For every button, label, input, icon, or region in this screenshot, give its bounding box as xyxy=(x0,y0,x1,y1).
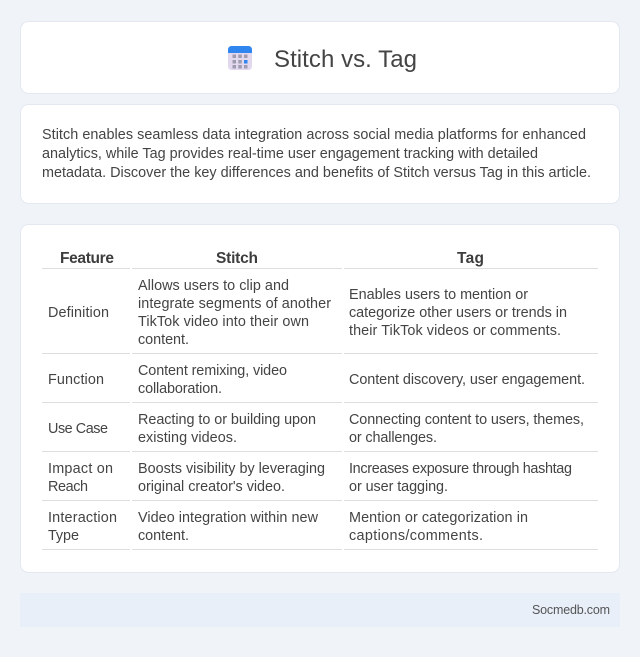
row: interaction type: Mention or categorization in xyxy=(349,510,528,526)
row: function: Content discovery, user engagement. xyxy=(349,372,585,388)
row: definition: TikTok video into their own xyxy=(138,314,309,330)
row: interaction type: captions/comments. xyxy=(349,528,483,544)
row: definition: Definition xyxy=(48,305,109,321)
title: Stitch vs. Tag xyxy=(274,46,417,73)
row: impact on reach: Increases exposure through hashtag xyxy=(349,461,572,477)
row: interaction type: content. xyxy=(138,528,189,544)
row: definition: content. xyxy=(138,332,189,348)
row: definition: Enables users to mention or xyxy=(349,287,528,303)
row: impact on reach: or user tagging. xyxy=(349,479,448,495)
row: definition: their TikTok videos or comments. xyxy=(349,323,561,339)
row: definition: Allows users to clip and xyxy=(138,278,289,294)
row: impact on reach: Impact on xyxy=(48,461,113,477)
panel: title card xyxy=(20,22,620,94)
row: use case: existing videos. xyxy=(138,430,237,446)
row: function: Function xyxy=(48,372,104,388)
row: interaction type: Video integration within new xyxy=(138,510,319,526)
row: interaction type: Interaction xyxy=(48,510,117,526)
table header xyxy=(60,250,484,267)
intro paragraph: Stitch enables seamless data integration across social media platforms for enhanced xyxy=(42,127,586,143)
panel: comparison table xyxy=(20,224,620,572)
table header: Feature xyxy=(60,250,114,267)
row: function xyxy=(48,363,585,397)
row: function: collaboration. xyxy=(138,381,222,397)
row: use case: Reacting to or building upon xyxy=(138,412,316,428)
row: impact on reach xyxy=(48,461,572,495)
row: impact on reach: original creator's video. xyxy=(138,479,285,495)
footer source: Socmedb.com xyxy=(532,603,610,617)
panel: intro text xyxy=(20,104,620,204)
row: definition: integrate segments of another xyxy=(138,296,331,312)
row: definition: categorize other users or trends in xyxy=(349,305,567,321)
row: impact on reach: Boosts visibility by leveraging xyxy=(138,461,325,477)
intro paragraph: metadata. Discover the key differences and benefits of Stitch versus Tag in this article. xyxy=(42,165,591,181)
row: use case: Use Case xyxy=(48,421,108,437)
intro paragraph xyxy=(42,127,591,181)
table header: Stitch xyxy=(216,250,258,267)
row: interaction type: Type xyxy=(48,528,79,544)
row: use case: or challenges. xyxy=(349,430,437,446)
icon: calendar xyxy=(228,46,252,70)
table header: Tag xyxy=(457,250,484,267)
row: use case: Connecting content to users, themes, xyxy=(349,412,584,428)
row: function: Content remixing, video xyxy=(138,363,287,379)
intro paragraph: analytics, while Tag provides real-time user engagement tracking with detailed xyxy=(42,146,538,162)
row: impact on reach: Reach xyxy=(48,479,88,495)
row: definition xyxy=(48,278,567,348)
row: use case xyxy=(48,412,584,446)
footer xyxy=(20,593,620,627)
row: interaction type xyxy=(48,510,528,544)
